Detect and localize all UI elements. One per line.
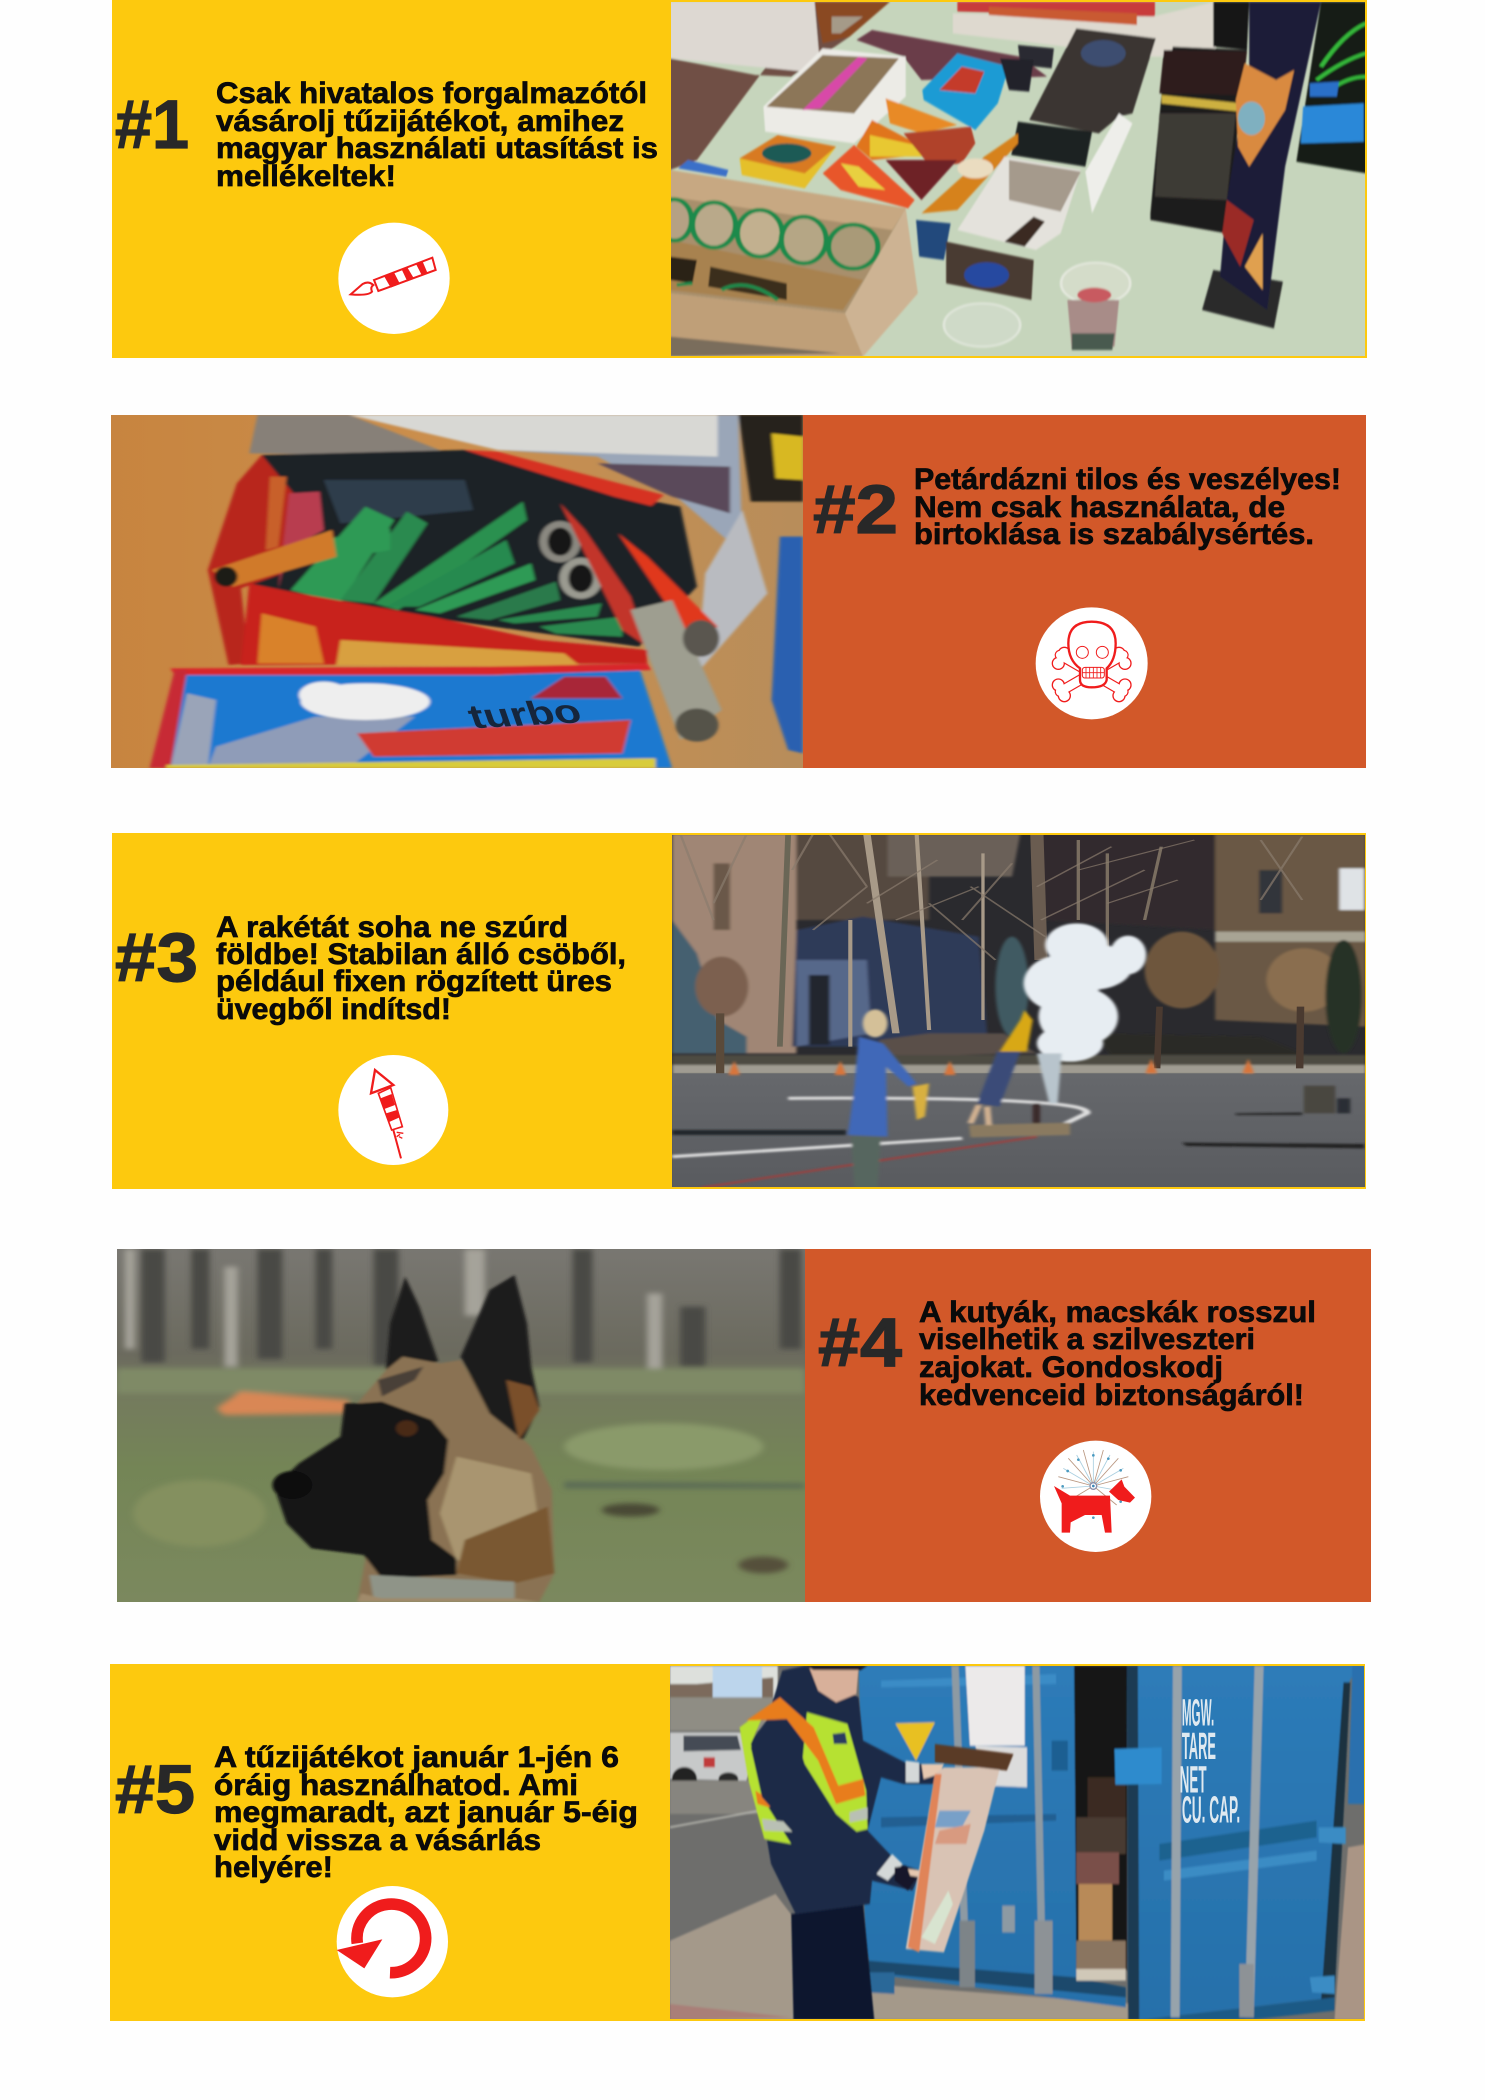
text block 1: magyar használati utasítást is (216, 132, 658, 165)
photo: rocket demonstration with dummies (664, 820, 1377, 1200)
panel 2 background (111, 415, 1366, 768)
photo: policeman at a container (670, 1664, 1370, 2024)
text block 5 (214, 1741, 638, 1884)
text block 4 (919, 1296, 1316, 1412)
container lettering: NET (1180, 1758, 1207, 1801)
photo: dog portrait (117, 1249, 805, 1602)
text block 3: A rakétát soha ne szúrd (216, 911, 568, 944)
icon: dog and firework burst (1040, 1441, 1151, 1552)
number 2: #2 (813, 471, 898, 548)
icon: firecracker (338, 223, 450, 334)
text block 5: vidd vissza a vásárlás (214, 1824, 541, 1857)
icon: skull and crossbones (1036, 607, 1148, 719)
photo: box of firecrackers (100, 400, 813, 780)
panel 3: never stick the rocket into the ground (112, 820, 1377, 1200)
number 5: #5 (115, 1751, 195, 1828)
panel 5 background (110, 1664, 1365, 2021)
text block 1 (216, 77, 658, 193)
photo: fireworks on a table (657, 0, 1370, 360)
text block 2: Petárdázni tilos és veszélyes! (914, 463, 1341, 496)
panel 1: official seller (112, 0, 1370, 360)
text block 4: kedvenceid biztonságáról! (919, 1379, 1304, 1412)
photo: policeman at a container: TARE (1182, 1724, 1216, 1767)
text block 2: birtoklása is szabálysértés. (914, 518, 1314, 551)
panel 3 background (112, 833, 1366, 1189)
text block 1: vásárolj tűzijátékot, amihez (216, 105, 624, 138)
text block 1: mellékeltek! (216, 160, 396, 193)
container lettering (1180, 1699, 1240, 1823)
text block 2: Nem csak használata, de (914, 491, 1285, 524)
icon: rocket (338, 1055, 448, 1165)
photo: policeman at a container: CU. CAP. (1182, 1788, 1240, 1831)
icon: return arrow (337, 1886, 448, 1997)
text block 4: A kutyák, macskák rosszul (919, 1296, 1316, 1329)
text block 5: óráig használhatod. Ami (214, 1769, 578, 1802)
text block 5: megmaradt, azt január 5-éig (214, 1796, 638, 1829)
box lettering: turbo (463, 693, 586, 736)
text block 5: helyére! (214, 1851, 333, 1884)
panel 4: pets (100, 1240, 1371, 1620)
text block 3 (216, 911, 626, 1026)
text block 4: zajokat. Gondoskodj (919, 1351, 1223, 1384)
panel 2: firecrackers are forbidden (100, 400, 1366, 780)
panel 4 background (117, 1249, 1371, 1602)
text block 2 (914, 463, 1341, 551)
text block 4: viselhetik a szilveszteri (919, 1323, 1255, 1356)
number 1: #1 (115, 86, 189, 163)
text block 3: földbe! Stabilan álló csöből, (216, 938, 626, 971)
text block 5: A tűzijátékot január 1-jén 6 (214, 1741, 619, 1774)
text block 3: például fixen rögzített üres (216, 965, 612, 998)
text block 3: üvegből indítsd! (216, 993, 451, 1026)
panel 1 background (112, 0, 1367, 358)
panel 5: use until January 1st (110, 1664, 1370, 2024)
number 4: #4 (818, 1304, 902, 1381)
photo: policeman at a container: MGW. (1182, 1691, 1214, 1734)
text block 1: Csak hivatalos forgalmazótól (216, 77, 647, 110)
number 3: #3 (115, 919, 198, 996)
